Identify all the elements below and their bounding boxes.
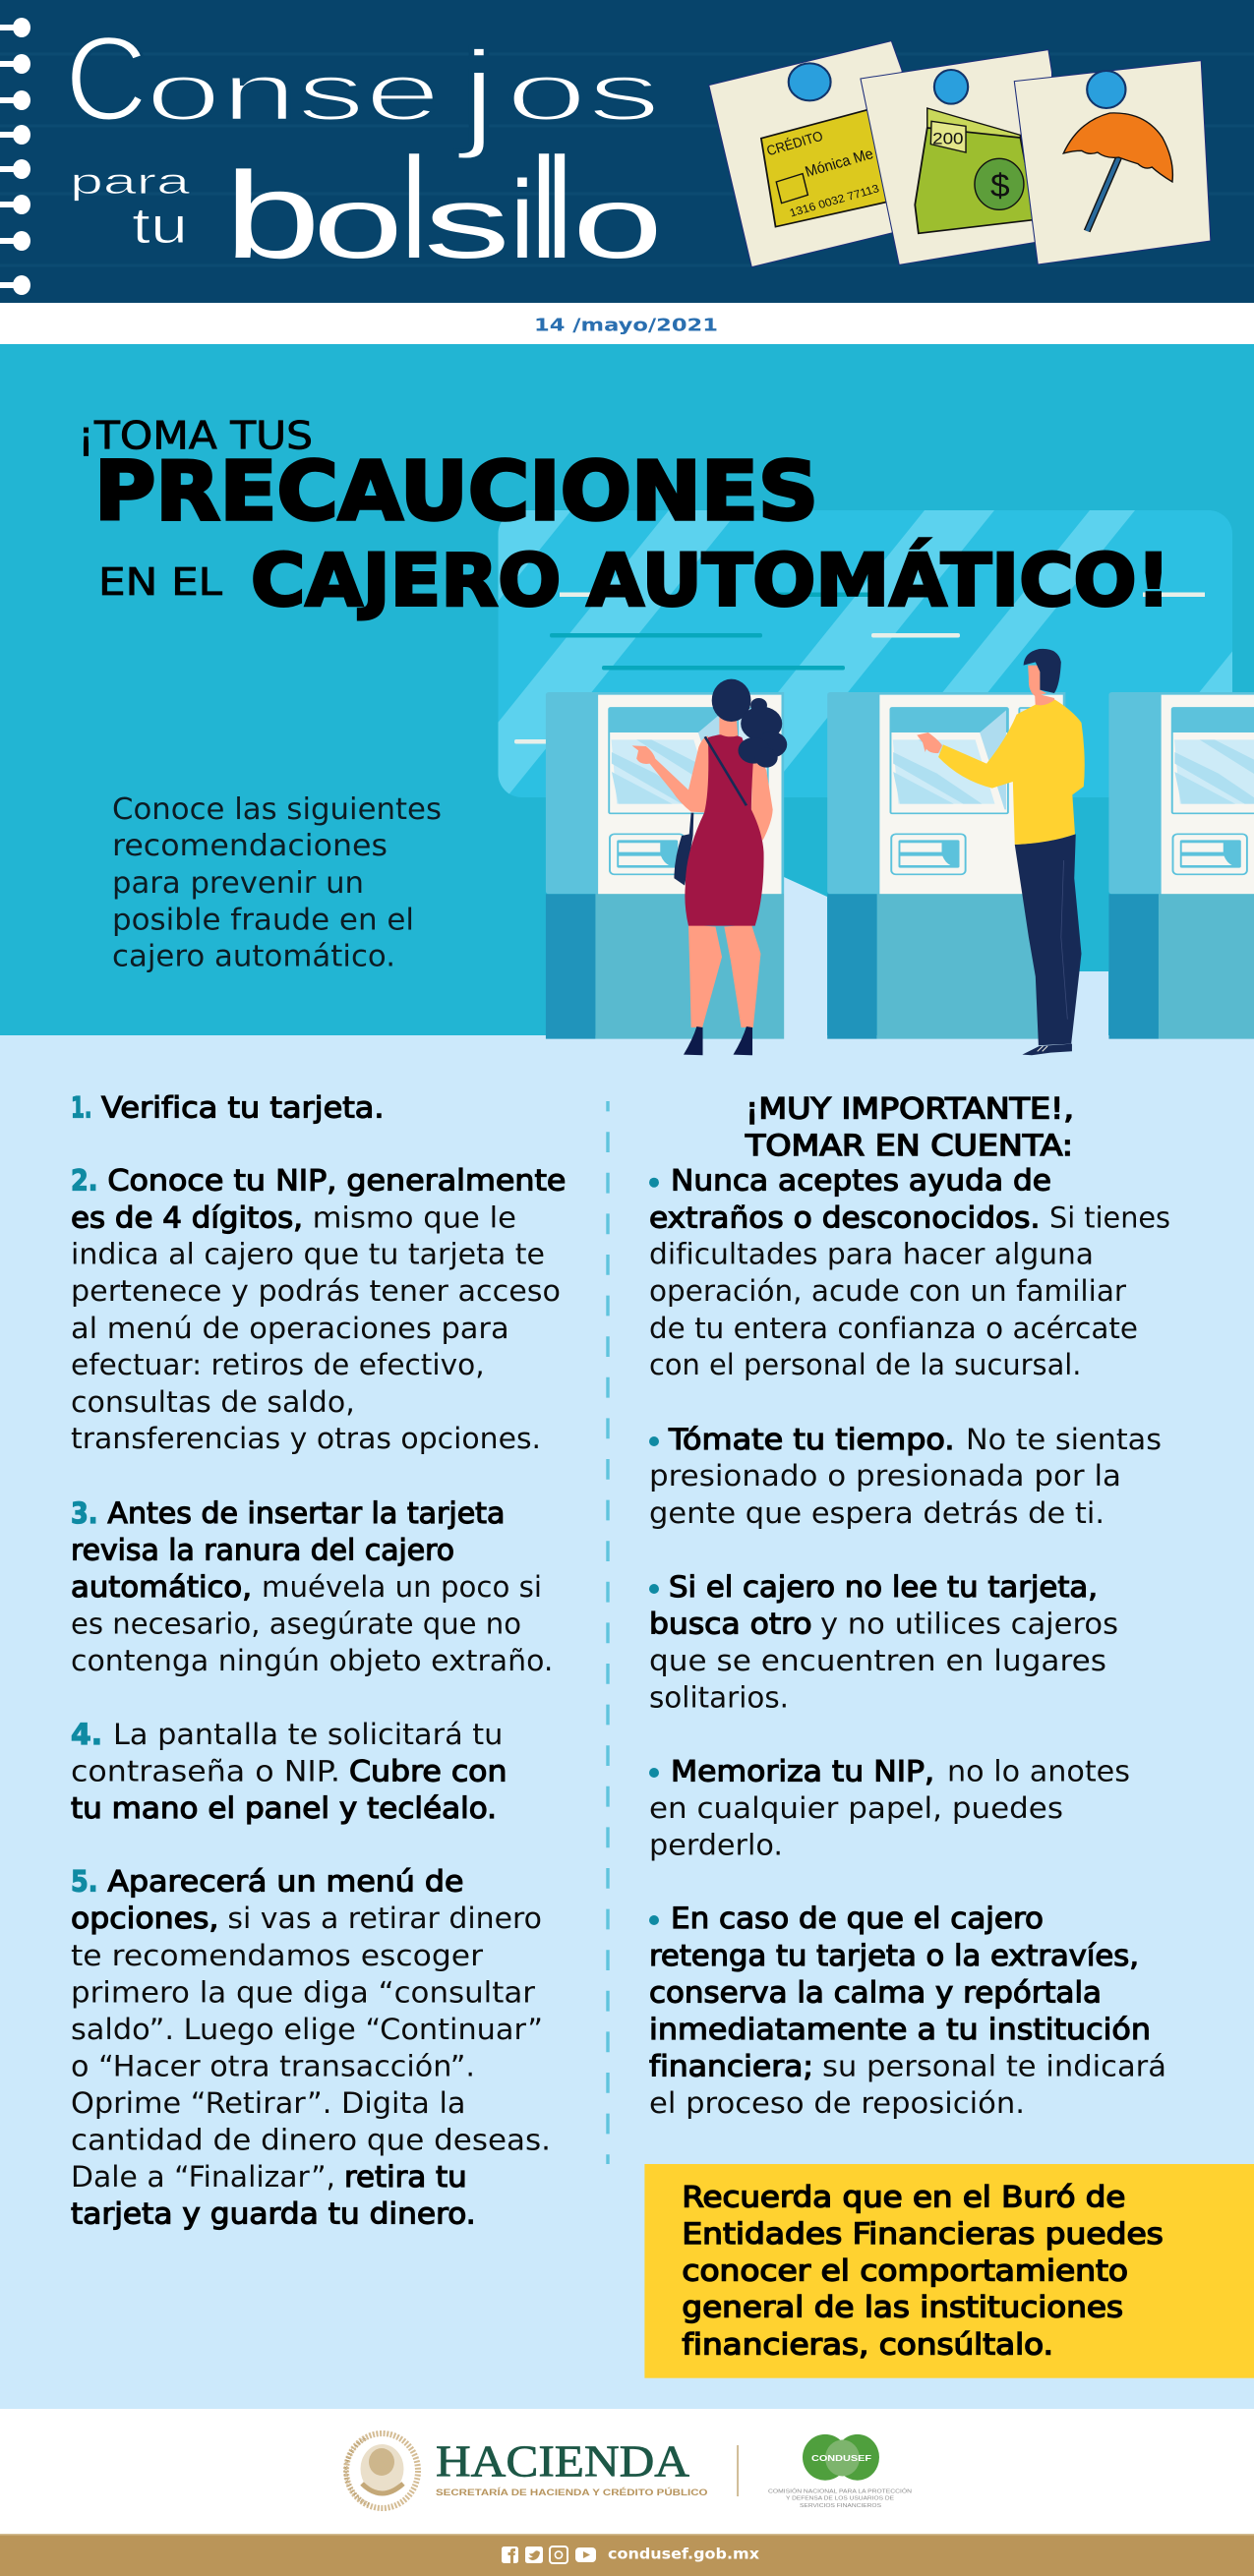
main title: EN EL (98, 560, 222, 604)
main title: CAJERO AUTOMÁTICO! (251, 538, 1170, 622)
panel: logos footer (343, 2430, 912, 2511)
woman (632, 679, 787, 1055)
Condusef logo: SERVICIOS FINANCIEROS (800, 2503, 881, 2509)
step 5: saldo”. Luego elige “Continuar” (71, 2013, 543, 2046)
important heading (745, 1091, 1074, 1162)
illustration: ATMs and people (546, 649, 1254, 1055)
word: bolsillo (224, 128, 663, 288)
ATM 2 (827, 692, 1065, 1039)
step 3 (71, 1496, 553, 1677)
intro text: recomendaciones (112, 829, 388, 863)
step 4: contraseña o NIP. (71, 1755, 340, 1788)
step 5: opciones, (71, 1902, 218, 1935)
word: bolsillo: s (424, 166, 510, 280)
step 5: tarjeta y guarda tu dinero. (71, 2197, 476, 2231)
left column steps (71, 1091, 566, 2231)
callout: Buró de Entidades Financieras: Recuerda que en el Buró de (682, 2180, 1125, 2213)
intro text: Conoce las siguientes (112, 792, 442, 827)
tip 3 (649, 1570, 1118, 1715)
step 5: si vas a retirar dinero (227, 1902, 542, 1935)
step 4: La pantalla te solicitará tu (113, 1718, 503, 1751)
step 3: automático, (71, 1570, 252, 1604)
step 2: 2. (71, 1164, 98, 1198)
word: bolsillo: l (401, 128, 427, 288)
website: condusef.gob.mx (608, 2546, 759, 2563)
important heading: ¡MUY IMPORTANTE!, (746, 1091, 1074, 1125)
step 2: pertenece y podrás tener acceso (71, 1274, 561, 1308)
word: bolsillo: o (572, 166, 663, 280)
note: banknote (861, 50, 1053, 264)
tip 4: no lo anotes (947, 1755, 1130, 1788)
step 2: transferencias y otras opciones. (71, 1422, 541, 1455)
tip 5: En caso de que el cajero (671, 1902, 1044, 1935)
tip 1: operación, acude con un familiar (649, 1274, 1126, 1308)
note: credit card (709, 41, 906, 267)
Condusef logo: COMISIÓN NACIONAL PARA LA PROTECCIÓN (768, 2488, 912, 2494)
header title: onse (146, 46, 441, 138)
tip 3: Si el cajero no lee tu tarjeta, (669, 1570, 1098, 1604)
step 3: Antes de insertar la tarjeta (107, 1496, 505, 1530)
social icons (502, 2547, 596, 2563)
step 5: retira tu (344, 2160, 467, 2194)
step 5: Aparecerá un menú de (107, 1864, 463, 1898)
note: credit card: 1316 0032 77113 (788, 182, 881, 219)
step 5: primero la que diga “consultar (71, 1976, 535, 2010)
step 3: revisa la ranura del cajero (71, 1534, 454, 1567)
step 2: consultas de saldo, (71, 1385, 355, 1419)
step 1: Verifica tu tarjeta. (101, 1091, 384, 1125)
step 2: efectuar: retiros de efectivo, (71, 1348, 485, 1381)
tip 3: busca otro (649, 1608, 812, 1641)
tip 4: en cualquier papel, puedes (649, 1791, 1063, 1825)
word: bolsillo: o (313, 166, 403, 280)
Hacienda wordmark (436, 2437, 708, 2497)
word: bolsillo: l (531, 128, 557, 288)
note: credit card: CRÉDITO (764, 128, 825, 159)
footer bar (0, 2534, 1254, 2576)
ATM 3 (1108, 692, 1254, 1039)
tip 5 (649, 1902, 1166, 2120)
tip 1: extraños o desconocidos. (649, 1200, 1040, 1234)
tip 4: Memoriza tu NIP, (671, 1755, 934, 1788)
tip 3: y no utilices cajeros (820, 1608, 1118, 1641)
callout: Buró de Entidades Financieras: general de las instituciones (682, 2291, 1123, 2324)
tip 2: presionado o presionada por la (649, 1459, 1121, 1493)
tip 2 (649, 1423, 1162, 1530)
callout: Buró de Entidades Financieras: financieras, consúltalo. (682, 2327, 1053, 2361)
tip 3: solitarios. (649, 1681, 789, 1715)
floor (784, 877, 1108, 1040)
tip 5: el proceso de reposición. (649, 2086, 1025, 2120)
step 4: 4. (71, 1718, 102, 1751)
step 3: muévela un poco si (262, 1570, 542, 1604)
step 5: cantidad de dinero que deseas. (71, 2124, 551, 2157)
header title: os (506, 46, 661, 138)
panel: hero (0, 344, 1254, 1055)
header title: para (70, 161, 191, 202)
step 2: Conoce tu NIP, generalmente (107, 1164, 566, 1198)
main title: ¡TOMA TUS (78, 415, 313, 458)
tip 3: que se encuentren en lugares (649, 1644, 1106, 1677)
step 3: 3. (71, 1496, 98, 1530)
tip 2: No te sientas (966, 1423, 1162, 1456)
main title (78, 415, 1170, 622)
note: credit card: Mónica Me (804, 146, 875, 181)
tip 5: su personal te indicará (822, 2050, 1166, 2083)
Hacienda wordmark: SECRETARÍA DE HACIENDA Y CRÉDITO PÚBLICO (436, 2487, 708, 2497)
tip 1: dificultades para hacer alguna (649, 1238, 1094, 1271)
word: bolsillo: l (547, 128, 572, 288)
man (917, 649, 1085, 1055)
callout: Buró de Entidades Financieras: conocer el comportamiento (682, 2254, 1128, 2287)
tip 1: de tu entera confianza o acércate (649, 1312, 1138, 1345)
note: banknote: 200 (932, 129, 964, 148)
Condusef logo: Y DEFENSA DE LOS USUARIOS DE (786, 2496, 894, 2502)
tip 1: Si tienes (1049, 1200, 1170, 1234)
step 3: es necesario, asegúrate que no (71, 1608, 521, 1641)
step 2: mismo que le (313, 1200, 516, 1234)
Condusef logo (768, 2434, 912, 2509)
callout: Buró de Entidades Financieras (644, 2164, 1254, 2378)
Condusef logo: CONDUSEF (811, 2453, 871, 2463)
step 4 (71, 1718, 508, 1825)
step 5: o “Hacer otra transacción”. (71, 2050, 475, 2083)
right column tips (649, 1091, 1170, 2120)
intro text (112, 792, 442, 974)
tip 5: retenga tu tarjeta o la extravíes, (649, 1939, 1139, 1972)
header title: tu (132, 198, 188, 255)
note: banknote: $ (990, 168, 1010, 205)
tip 2: gente que espera detrás de ti. (649, 1496, 1105, 1530)
emblem: ESTADOS UNIDOS MEXICANOS (344, 2436, 370, 2506)
step 5: Oprime “Retirar”. Digita la (71, 2086, 466, 2120)
step 2: indica al cajero que tu tarjeta te (71, 1238, 545, 1271)
date: 14 /mayo/2021 (534, 315, 718, 336)
step 5 (71, 1864, 551, 2231)
background window (498, 510, 1232, 797)
tip 1 (649, 1164, 1170, 1381)
step 1: 1. (71, 1091, 92, 1125)
intro text: para prevenir un (112, 866, 364, 901)
tip 2: Tómate tu tiempo. (668, 1423, 954, 1456)
tip 5: inmediatamente a tu institución (649, 2013, 1151, 2046)
recommendations background (0, 1035, 1254, 2409)
main title: PRECAUCIONES (94, 445, 818, 539)
pinned notes illustration (709, 41, 1211, 267)
step 5: te recomendamos escoger (71, 1939, 483, 1972)
step 4: Cubre con (349, 1755, 508, 1788)
callout: Buró de Entidades Financieras: Entidades Financieras puedes (682, 2217, 1164, 2251)
step 2: al menú de operaciones para (71, 1312, 509, 1345)
Hacienda wordmark: HACIENDA (436, 2437, 690, 2487)
panel: recommendations (71, 1091, 1254, 2378)
header title: C (65, 12, 148, 146)
tip 1: Nunca aceptes ayuda de (671, 1164, 1051, 1198)
step 2 (71, 1164, 566, 1455)
tip 1: con el personal de la sucursal. (649, 1348, 1082, 1381)
tip 5: conserva la calma y repórtala (649, 1976, 1102, 2010)
step 3: contenga ningún objeto extraño. (71, 1644, 553, 1677)
note: umbrella (1014, 61, 1211, 264)
step 5: Dale a “Finalizar”, (71, 2160, 335, 2194)
ATM 1 (546, 692, 784, 1039)
important heading: TOMAR EN CUENTA: (745, 1129, 1073, 1162)
tip 4: perderlo. (649, 1829, 783, 1862)
intro text: cajero automático. (112, 940, 395, 974)
emblem (343, 2430, 421, 2511)
header title (65, 12, 663, 288)
intro text: posible fraude en el (112, 903, 414, 938)
step 2: es de 4 dígitos, (71, 1200, 303, 1234)
tip 4 (649, 1755, 1130, 1862)
notebook rings (0, 18, 30, 295)
step 4: tu mano el panel y tecléalo. (71, 1791, 497, 1825)
word: bolsillo: b (224, 147, 321, 284)
step 5: 5. (71, 1864, 98, 1898)
tip 5: financiera; (649, 2050, 813, 2083)
header title: j (456, 27, 498, 161)
header banner (0, 0, 1254, 303)
word: bolsillo: i (510, 158, 534, 281)
